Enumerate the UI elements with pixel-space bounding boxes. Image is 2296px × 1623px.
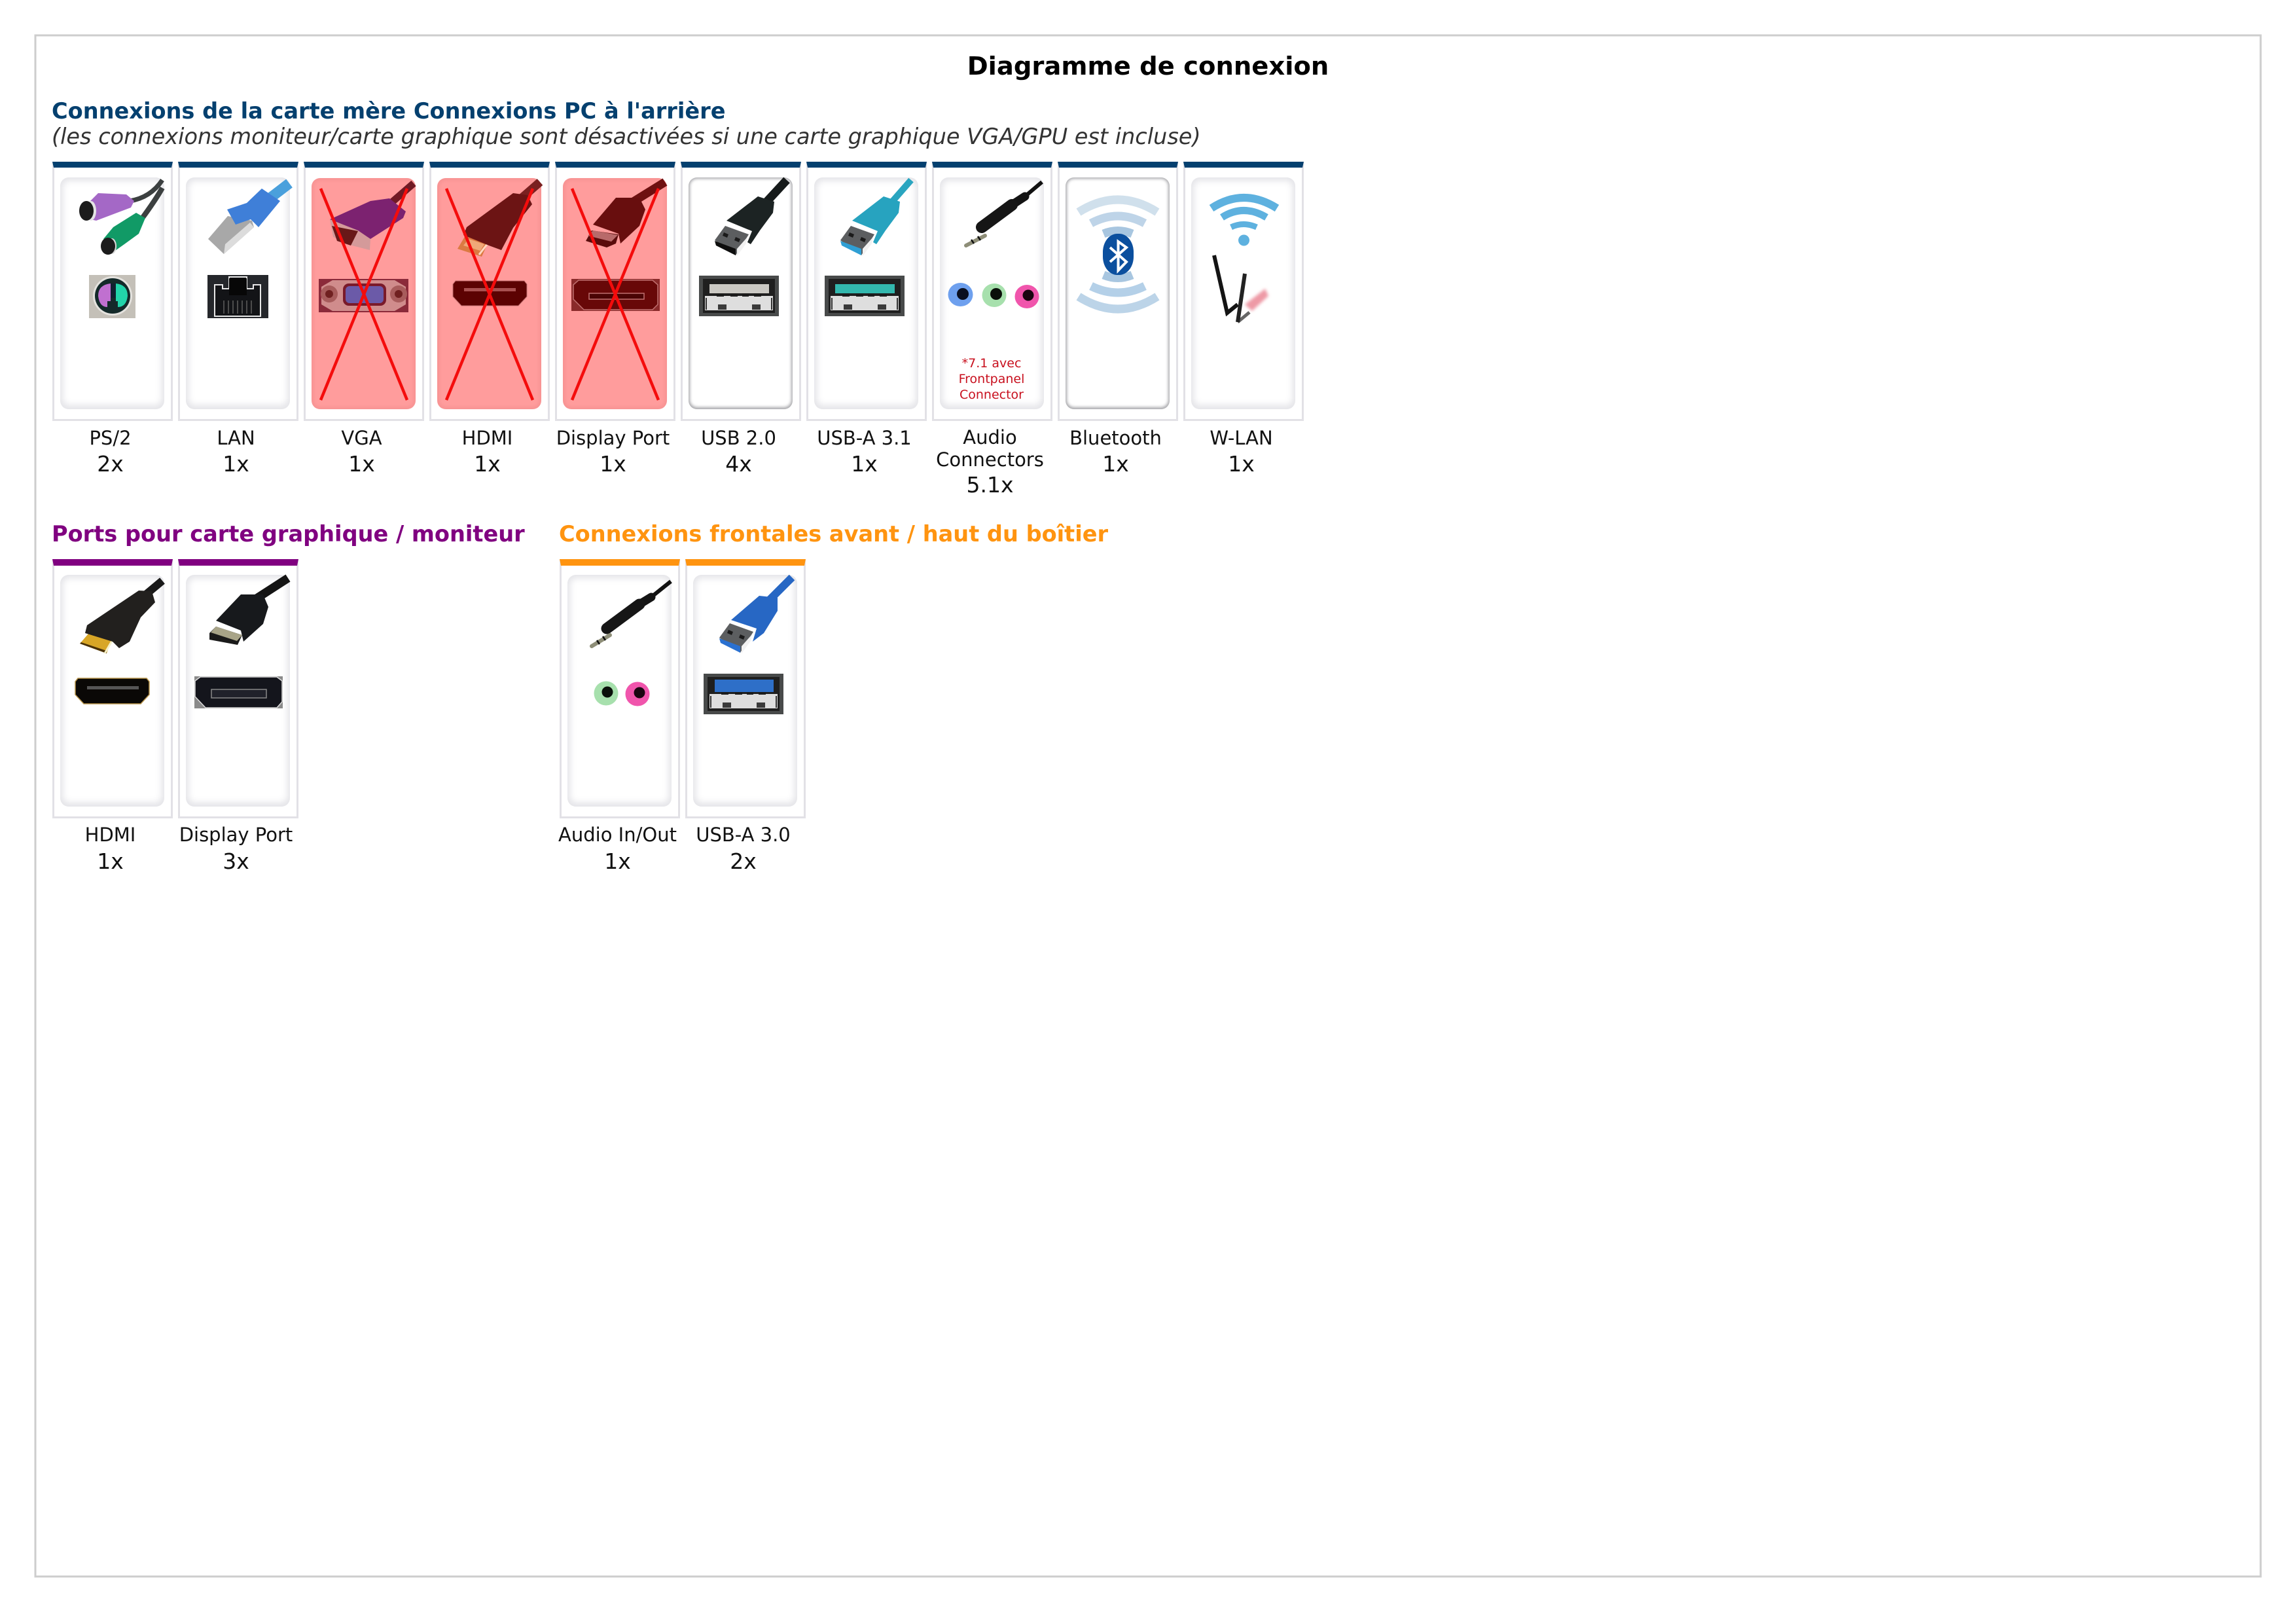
icon: USB 2.0 plug [715,180,787,256]
icon: DisplayPort plug [209,578,288,645]
icon: audio jack [592,581,671,646]
icon: HDMI plug tinted [457,182,540,257]
card: Bluetooth [1058,162,1178,477]
icon: DisplayPort port [194,676,283,708]
label: USB 2.0 [701,427,776,449]
card: USB-A 3.1 [806,162,927,477]
note: 7.1 with front panel: Frontpanel [959,372,1024,386]
icon: DisplayPort port tinted [571,279,660,311]
count: 1x [600,451,626,477]
heading: motherboard rear connections: Connexions de la carte mère Connexions PC à l'arrière [52,98,725,124]
red cross [572,189,658,400]
card: PS/2 [52,162,173,477]
icon: audio ports [594,681,649,706]
count: 2x [97,451,124,477]
title: Diagramme de connexion [967,52,1329,81]
label: LAN [217,427,255,449]
card: GPU Display Port [178,559,298,874]
label: HDMI [85,824,135,846]
card: Display Port (disabled) [555,162,675,477]
icon: audio ports [948,283,1039,308]
icon: USB 2.0 port [699,276,779,316]
icon: RJ45 plug [208,183,289,254]
label: USB-A 3.1 [817,427,912,449]
icon: USB 3.0 plug [719,577,792,653]
label: PS/2 [89,427,132,449]
note: 7.1 with front panel: *7.1 avec [962,356,1021,371]
icon: USB 3.0 port [704,674,783,714]
icon: audio jack [966,182,1042,246]
icon: USB-A 3.1 port [825,276,905,316]
red cross [446,189,533,400]
count: 3x [223,848,249,874]
card: VGA (disabled) [304,162,424,477]
label: HDMI [462,427,512,449]
red cross [321,189,407,400]
heading: graphics card ports: Ports pour carte graphique / moniteur [52,521,525,547]
card: HDMI (disabled) [429,162,550,477]
card: front Audio In/Out [558,559,680,874]
icon: Bluetooth badge [1103,234,1134,275]
card: LAN [178,162,298,477]
icon: PS/2 port [89,275,135,318]
label: Audio In/Out [558,824,677,846]
card: Audio Connectors [932,162,1052,498]
count: 5.1x [966,472,1014,498]
count: 1x [474,451,501,477]
icon: PS/2 plugs [79,180,162,255]
label: Display Port [556,427,670,449]
card: W-LAN [1183,162,1304,477]
note: 7.1 with front panel [959,356,1024,402]
label: Bluetooth [1069,427,1162,449]
count: 1x [97,848,124,874]
icon: Bluetooth waves [1079,200,1157,309]
count: 2x [730,848,757,874]
note: 7.1 with front panel: Connector [960,388,1024,402]
label: VGA [341,427,382,449]
label [936,426,1044,471]
icon: HDMI port tinted [453,281,527,306]
icon: Wi-Fi waves [1211,198,1277,246]
label: Display Port [179,824,293,846]
icon: HDMI plug [80,581,162,653]
icon: VGA plug tinted [330,183,414,250]
count: 1x [604,848,631,874]
count: 4x [725,451,752,477]
icon: antenna adapter [1214,255,1268,322]
label: Connectors [936,448,1044,471]
icon: RJ45 port [207,275,268,318]
count: 1x [348,451,375,477]
count: 1x [851,451,878,477]
card: GPU HDMI [52,559,173,874]
icon: VGA port tinted [319,279,408,312]
label: W-LAN [1210,427,1273,449]
heading: front connections: Connexions frontales avant / haut du boîtier [559,521,1109,547]
icon: HDMI port [75,678,149,704]
label: Audio [963,426,1017,448]
card: USB 2.0 [681,162,801,477]
icon: DisplayPort plug tinted [586,182,665,247]
count: 1x [223,451,249,477]
count: 1x [1102,451,1129,477]
icon: USB-A 3.1 plug [840,180,911,256]
subheading note: (les connexions moniteur/carte graphique sont désactivées si une carte graphique VGA/GPU est incluse) [52,124,1201,149]
card: front USB-A 3.0 [685,559,806,874]
count: 1x [1228,451,1255,477]
label: USB-A 3.0 [696,824,791,846]
